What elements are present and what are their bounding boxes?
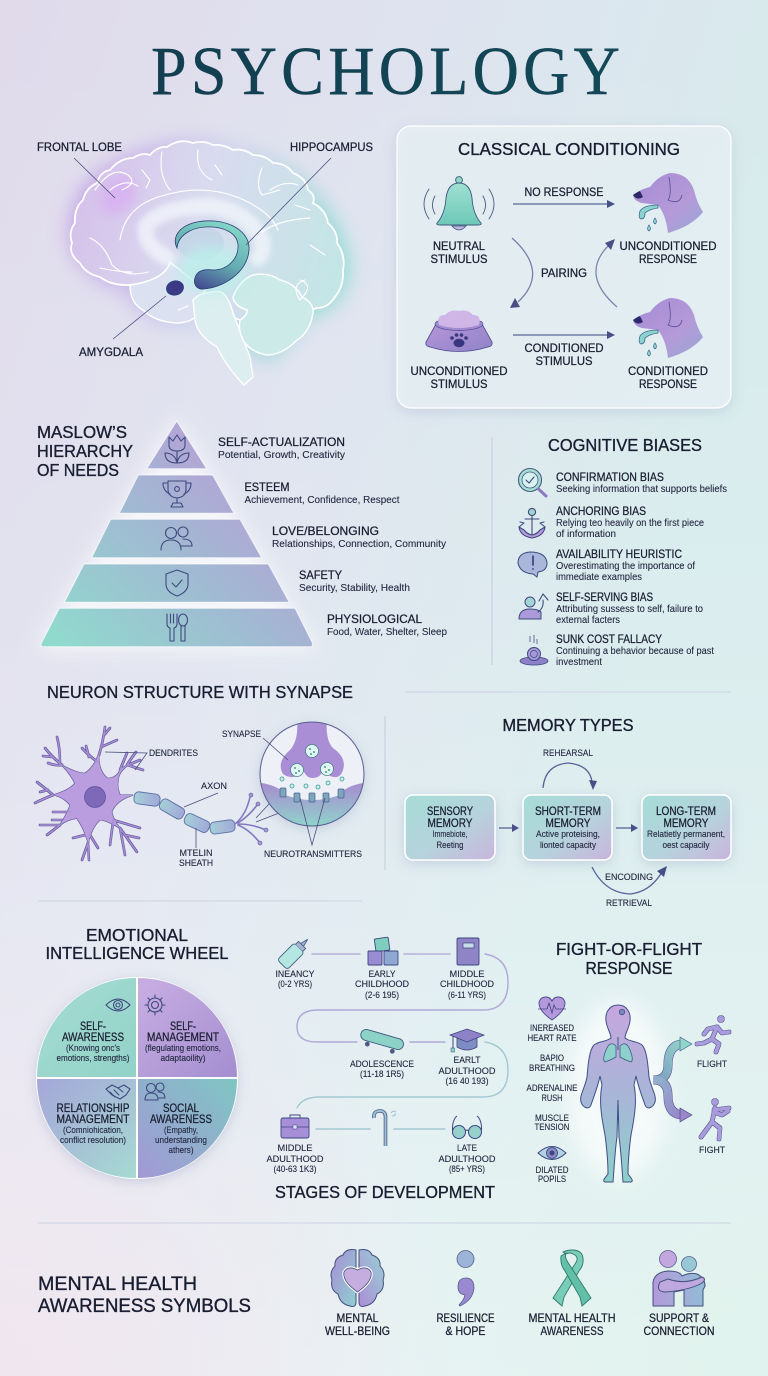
list: symptoms bbox=[526, 1023, 578, 1133]
list: symptoms: TENSION bbox=[534, 1122, 570, 1133]
brain labels bbox=[37, 140, 373, 359]
label resilience and hope bbox=[436, 1311, 494, 1338]
label unconditioned response: UNCONDITIONED bbox=[620, 239, 717, 253]
body glow bbox=[568, 1000, 668, 1180]
tier labels: Security, Stability, Health bbox=[299, 582, 410, 594]
icon: blocks bbox=[368, 937, 398, 965]
quadrant: social awareness: understanding bbox=[155, 1135, 207, 1146]
label unconditioned response bbox=[620, 239, 717, 266]
quadrant: relationship management: conflict resolution) bbox=[60, 1135, 126, 1146]
gyri lines bbox=[90, 150, 325, 310]
label early adulthood bbox=[438, 1055, 496, 1087]
tier labels bbox=[218, 435, 447, 638]
icon: skateboard bbox=[358, 1028, 405, 1056]
label support and connection: SUPPORT & bbox=[649, 1311, 709, 1325]
quadrant: self-awareness bbox=[37, 978, 136, 1077]
label early childhood: CHILDHOOD bbox=[355, 979, 409, 990]
label early childhood: (2-6 195) bbox=[365, 990, 399, 1001]
text: self-serving bias bbox=[556, 590, 703, 626]
text: sunk cost fallacy: Continuing a behavior because of past bbox=[556, 645, 714, 657]
label early adulthood: (16 40 193) bbox=[446, 1076, 488, 1087]
text: self-serving bias: external facters bbox=[556, 614, 620, 626]
timeline path bbox=[297, 954, 508, 1129]
label unconditioned stimulus: STIMULUS bbox=[430, 377, 488, 391]
text: sunk cost fallacy bbox=[556, 632, 714, 668]
label mental well-being: WELL-BEING bbox=[325, 1324, 390, 1338]
card bbox=[397, 126, 731, 408]
tier labels: SELF-ACTUALIZATION bbox=[218, 435, 345, 449]
label adolescence bbox=[350, 1059, 414, 1080]
box: short-term memory: SHORT-TERM bbox=[535, 804, 601, 818]
panel: classical conditioning bbox=[397, 126, 731, 408]
label flight: FLIGHT bbox=[697, 1059, 727, 1070]
icon: dilated eye bbox=[538, 1146, 566, 1160]
label dilated pupils: POPILS bbox=[538, 1174, 566, 1185]
label adolescence: ADOLESCENCE bbox=[350, 1059, 414, 1070]
tier labels: ESTEEM bbox=[244, 480, 290, 494]
neuron labels and leaders: NEUROTRANSMITTERS bbox=[264, 849, 362, 860]
arrow: encoding retrieval bbox=[592, 866, 667, 894]
icon: ribbon bbox=[553, 1250, 591, 1306]
label encoding: ENCODING bbox=[605, 872, 653, 883]
pyramid tier: safety bbox=[64, 564, 289, 602]
text: anchoring bias: of information bbox=[556, 528, 616, 540]
heading: MEMORY TYPES bbox=[502, 715, 634, 735]
quadrant: self-management: MANAGEMENT bbox=[147, 1030, 220, 1044]
arrow: conditioned stimulus: CONDITIONED bbox=[524, 341, 604, 355]
axon myelin sheaths bbox=[133, 791, 236, 835]
label middle childhood: CHILDHOOD bbox=[440, 979, 494, 990]
quadrant: self-management: (flegulating emotions, bbox=[145, 1043, 221, 1054]
box: short-term memory: MEMORY bbox=[546, 816, 590, 830]
brain labels: HIPPOCAMPUS bbox=[290, 140, 373, 154]
heading: EMOTIONAL bbox=[86, 925, 188, 945]
panel: maslow hierarchy bbox=[36, 418, 447, 650]
arrow: short-term to long-term bbox=[616, 824, 638, 832]
tier labels: Achievement, Confidence, Respect bbox=[244, 494, 400, 506]
label early adulthood: EARLT bbox=[454, 1055, 481, 1066]
box: long-term memory: Relatietly permanent, bbox=[647, 829, 725, 840]
tier labels: Relationships, Connection, Community bbox=[272, 538, 447, 550]
text: anchoring bias: Relying teo heavily on the first piece bbox=[556, 517, 704, 529]
label mental health awareness bbox=[528, 1311, 616, 1338]
brain stem bbox=[193, 292, 253, 385]
heading: CLASSICAL CONDITIONING bbox=[458, 139, 680, 159]
quadrant: self-management: adaptaoility) bbox=[160, 1053, 206, 1064]
heading: MASLOW’S bbox=[37, 422, 127, 442]
hippocampus bbox=[175, 221, 249, 289]
list: symptoms: ADRENALINE bbox=[526, 1083, 578, 1094]
label neutral stimulus: NEUTRAL bbox=[433, 239, 485, 253]
icon: head bubble bbox=[518, 552, 547, 577]
icon: bell bbox=[424, 177, 494, 230]
tier labels: PHYSIOLOGICAL bbox=[327, 612, 422, 626]
temporal lobe bbox=[130, 262, 205, 323]
box: long-term memory: LONG-TERM bbox=[656, 804, 716, 818]
heading bbox=[38, 1273, 251, 1317]
icon: person with arrow bbox=[519, 594, 548, 619]
panel: brain diagram bbox=[37, 140, 373, 385]
heading: INTELLIGENCE WHEEL bbox=[46, 943, 229, 963]
label retrieval: RETRIEVAL bbox=[606, 898, 652, 909]
label dilated pupils: DILATED bbox=[536, 1165, 569, 1176]
label infancy: (0-2 YRS) bbox=[278, 979, 312, 990]
box: short-term memory: lionted capacity bbox=[540, 840, 596, 851]
list: symptoms: HEART RATE bbox=[528, 1033, 576, 1044]
text: sunk cost fallacy: SUNK COST FALLACY bbox=[556, 632, 662, 646]
text: confirmation bias: Seeking information that supports beliefs bbox=[556, 483, 727, 495]
teal glow bbox=[178, 246, 246, 294]
pyramid tier: self-actualization bbox=[147, 421, 207, 469]
label adolescence: (11-18 1R5) bbox=[360, 1069, 404, 1080]
box: sensory memory: MEMORY bbox=[428, 816, 472, 830]
heading: RESPONSE bbox=[586, 958, 672, 978]
box: sensory memory: Immebiote, bbox=[432, 829, 468, 840]
synapse magnified view bbox=[255, 718, 370, 830]
icon: flight runner bbox=[697, 1016, 729, 1052]
icon: brain with heart bbox=[331, 1250, 384, 1306]
label resilience and hope: RESILIENCE bbox=[436, 1311, 494, 1325]
amygdala bbox=[164, 278, 186, 298]
label middle adulthood: MIDDLE bbox=[278, 1143, 312, 1154]
label unconditioned stimulus bbox=[410, 364, 508, 391]
heading: FIGHT-OR-FLIGHT bbox=[556, 939, 702, 959]
heading bbox=[37, 422, 133, 480]
heading: OF NEEDS bbox=[37, 460, 119, 480]
icon: anchor bbox=[519, 508, 545, 538]
text: sunk cost fallacy: investment bbox=[556, 656, 602, 668]
text: confirmation bias: CONFIRMATION BIAS bbox=[556, 470, 664, 484]
label early adulthood: ADULTHOOD bbox=[438, 1066, 496, 1077]
limbic white band bbox=[145, 206, 262, 258]
leader lines bbox=[74, 158, 331, 339]
brain labels: FRONTAL LOBE bbox=[37, 140, 122, 154]
icon: graduation cap bbox=[450, 1029, 484, 1052]
tier labels: Potential, Growth, Creativity bbox=[218, 449, 346, 461]
list: symptoms: INEREASED bbox=[530, 1023, 574, 1034]
neuron labels and leaders: MTELIN bbox=[180, 848, 213, 859]
icon: fight figure bbox=[701, 1099, 729, 1139]
label middle childhood bbox=[440, 969, 494, 1001]
brain labels: AMYGDALA bbox=[79, 345, 143, 359]
text: availability heuristic: immediate examples bbox=[556, 571, 642, 583]
wheel backing bbox=[36, 977, 238, 1179]
pyramid tier: esteem bbox=[119, 475, 234, 513]
quadrant: social awareness bbox=[138, 1079, 237, 1178]
panel: neuron structure bbox=[35, 682, 370, 869]
label middle adulthood: (40-63 1K3) bbox=[274, 1164, 316, 1175]
label late adulthood: (85+ YRS) bbox=[449, 1164, 485, 1175]
label unconditioned stimulus: UNCONDITIONED bbox=[410, 364, 508, 378]
panel: memory types bbox=[405, 715, 731, 909]
label neutral stimulus: STIMULUS bbox=[430, 252, 488, 266]
label mental well-being: MENTAL bbox=[336, 1311, 379, 1325]
quadrant: self-management: SELF- bbox=[170, 1019, 196, 1033]
pyramid tier: love bbox=[92, 519, 262, 558]
arrow: conditioned stimulus bbox=[513, 331, 615, 368]
neuron labels and leaders: AXON bbox=[201, 781, 227, 792]
text: availability heuristic: AVAILABILITY HEURISTIC bbox=[556, 547, 682, 561]
quadrant: self-awareness: (Knowing onc’s bbox=[66, 1043, 120, 1054]
arrow: rehearsal bbox=[543, 763, 597, 790]
label unconditioned response: RESPONSE bbox=[639, 252, 697, 266]
tier labels: SAFETY bbox=[299, 568, 342, 582]
quadrant: self-management bbox=[138, 978, 237, 1077]
list: symptoms: MUSCLE bbox=[535, 1113, 569, 1124]
arrow: no response bbox=[513, 185, 615, 208]
neuron labels and leaders bbox=[105, 729, 362, 869]
label mental health awareness: MENTAL HEALTH bbox=[528, 1311, 616, 1325]
tier labels: Food, Water, Shelter, Sleep bbox=[327, 626, 447, 638]
label resilience and hope: & HOPE bbox=[446, 1324, 486, 1338]
label middle adulthood bbox=[266, 1143, 324, 1175]
box: long-term memory: MEMORY bbox=[664, 816, 708, 830]
panel: cognitive biases bbox=[518, 435, 727, 668]
label mental health awareness: AWARENESS bbox=[540, 1324, 604, 1338]
label conditioned response: CONDITIONED bbox=[628, 364, 708, 378]
box: sensory memory: SENSORY bbox=[427, 804, 473, 818]
neuron labels and leaders: SYNAPSE bbox=[222, 729, 261, 740]
label infancy: INEANCY bbox=[276, 969, 315, 980]
quadrant: social awareness: SOCIAL bbox=[163, 1101, 199, 1115]
label conditioned response: RESPONSE bbox=[639, 377, 697, 391]
arrow: sensory to short-term bbox=[499, 824, 519, 832]
label fight: FIGHT bbox=[699, 1145, 725, 1156]
quadrant: self-awareness: AWARENESS bbox=[62, 1030, 124, 1044]
label middle childhood: (6-11 YRS) bbox=[448, 990, 486, 1001]
human figure bbox=[581, 1005, 655, 1182]
text: self-serving bias: SELF-SERVING BIAS bbox=[556, 590, 653, 604]
arrows: flight and fight bbox=[654, 1044, 684, 1115]
label dilated pupils bbox=[536, 1165, 569, 1185]
list: symptoms: RUSH bbox=[542, 1093, 563, 1104]
text: anchoring bias: ANCHORING BIAS bbox=[556, 504, 646, 518]
nucleus bbox=[84, 786, 106, 808]
label middle adulthood: ADULTHOOD bbox=[266, 1154, 324, 1165]
box: long-term memory: oest capacily bbox=[662, 840, 710, 851]
label support and connection: CONNECTION bbox=[644, 1324, 714, 1338]
pyramid glow bbox=[36, 418, 318, 650]
icon: cane bbox=[374, 1111, 396, 1146]
icon: hugging people bbox=[653, 1250, 705, 1306]
label late adulthood: LATE bbox=[457, 1143, 477, 1154]
cerebellum bbox=[233, 274, 313, 355]
box: short-term memory: Active proteising, bbox=[536, 829, 600, 840]
text: availability heuristic bbox=[556, 547, 695, 583]
label rehearsal: REHEARSAL bbox=[543, 748, 593, 759]
brain glow bbox=[77, 145, 342, 355]
label infancy bbox=[276, 969, 315, 990]
panel: mental health awareness symbols bbox=[38, 1250, 714, 1338]
label late adulthood: ADULTHOOD bbox=[438, 1154, 496, 1165]
icon: baby bottle bbox=[277, 934, 313, 970]
label pairing: PAIRING bbox=[541, 266, 587, 280]
text: availability heuristic: Overestimating the importance of bbox=[556, 560, 695, 572]
heading: MENTAL HEALTH bbox=[38, 1273, 197, 1295]
icon: glasses bbox=[452, 1116, 482, 1138]
box: long-term memory bbox=[642, 795, 731, 860]
heading bbox=[46, 925, 229, 963]
label early childhood: EARLY bbox=[368, 969, 396, 980]
arrow: no response: NO RESPONSE bbox=[524, 185, 604, 199]
quadrant: social awareness: athers) bbox=[168, 1145, 194, 1156]
icon: sunk coin bbox=[520, 635, 548, 665]
icon: food bowl bbox=[426, 310, 492, 352]
label neutral stimulus bbox=[430, 239, 488, 266]
neuron labels and leaders: SHEATH bbox=[179, 858, 213, 869]
text: self-serving bias: Attributing sussess to self, failure to bbox=[556, 603, 703, 615]
purple frontal highlight bbox=[92, 168, 144, 222]
icon: dog unconditioned bbox=[633, 173, 703, 233]
heading: COGNITIVE BIASES bbox=[548, 435, 702, 455]
pyramid tier: physiological bbox=[41, 608, 313, 647]
label late adulthood bbox=[438, 1143, 496, 1175]
label conditioned response bbox=[628, 364, 708, 391]
brain outline bbox=[71, 141, 344, 320]
panel: emotional intelligence wheel bbox=[36, 925, 238, 1179]
list: symptoms: BAPIO bbox=[540, 1053, 564, 1064]
text: confirmation bias bbox=[556, 470, 727, 495]
box: sensory memory: Reeting bbox=[436, 840, 464, 851]
quadrant: relationship management: (Comniohication, bbox=[63, 1125, 123, 1136]
label early childhood bbox=[355, 969, 409, 1001]
central cavity bbox=[176, 226, 224, 260]
arrowhead fight bbox=[680, 1108, 692, 1122]
heading: AWARENESS SYMBOLS bbox=[38, 1295, 251, 1317]
box: short-term memory bbox=[523, 795, 612, 860]
label support and connection bbox=[644, 1311, 714, 1338]
tier labels: LOVE/BELONGING bbox=[272, 524, 379, 538]
icon: magnifier bbox=[518, 468, 546, 496]
heading: NEURON STRUCTURE WITH SYNAPSE bbox=[47, 682, 353, 702]
title: PSYCHOLOGY bbox=[151, 34, 624, 110]
quadrant: relationship management bbox=[37, 1079, 136, 1178]
text: anchoring bias bbox=[556, 504, 704, 540]
quadrant: relationship management: MANAGEMENT bbox=[56, 1112, 130, 1126]
heading bbox=[556, 939, 702, 978]
heading: STAGES OF DEVELOPMENT bbox=[275, 1182, 495, 1202]
icon: book bbox=[457, 938, 479, 965]
icon: heart bbox=[538, 997, 566, 1020]
arrow: pairing up bbox=[596, 239, 617, 307]
axon terminals bbox=[235, 797, 266, 843]
icon: semicolon bbox=[457, 1250, 474, 1306]
icon: briefcase bbox=[281, 1115, 309, 1138]
quadrant: relationship management: RELATIONSHIP bbox=[56, 1101, 130, 1115]
arrow: conditioned stimulus: STIMULUS bbox=[536, 354, 592, 368]
panel: fight or flight bbox=[526, 939, 729, 1185]
panel: stages of development bbox=[266, 934, 508, 1202]
quadrant: social awareness: (Empathy, bbox=[164, 1125, 198, 1136]
arrow: pairing down bbox=[510, 238, 533, 308]
label mental well-being bbox=[325, 1311, 390, 1338]
quadrant: self-awareness: emotions, strengths) bbox=[56, 1053, 130, 1064]
quadrant: self-awareness: SELF- bbox=[80, 1019, 106, 1033]
neuron labels and leaders: DENDRITES bbox=[149, 748, 198, 759]
neuron cell and dendrites bbox=[35, 727, 143, 860]
heading: HIERARCHY bbox=[37, 441, 133, 461]
quadrant: social awareness: AWARENESS bbox=[150, 1112, 212, 1126]
icon: dog conditioned bbox=[633, 298, 703, 358]
box: sensory memory bbox=[405, 795, 495, 860]
label middle childhood: MIDDLE bbox=[450, 969, 484, 980]
list: symptoms: BREATHING bbox=[529, 1063, 575, 1074]
